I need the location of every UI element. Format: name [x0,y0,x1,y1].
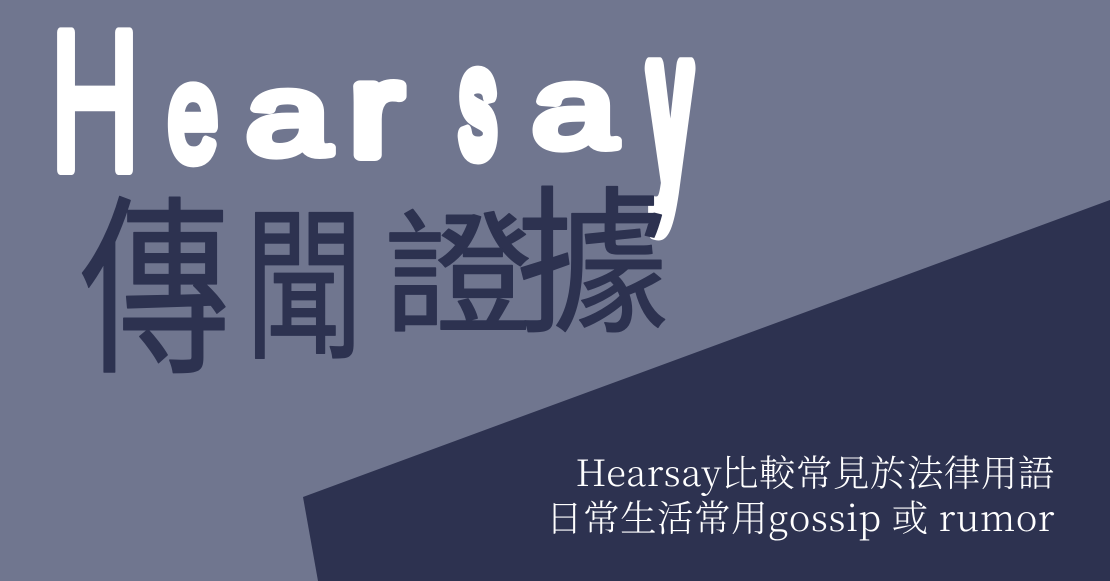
text block: caption: 日常生活常用gossip 或 rumor [546,490,1055,542]
character 傳: 傳 [80,135,230,413]
title: Hearsay: s [460,21,496,186]
letter a: a [246,51,330,179]
text block: caption [546,445,1055,542]
character 證: 證 [384,169,532,361]
letter e: e [168,38,218,189]
panel: dark diagonal shape [303,200,1110,581]
letter r: r [350,37,402,183]
letter a: a [532,44,616,172]
character 聞: 聞 [245,154,363,393]
title: 傳聞證據 [80,135,669,413]
text block: caption: Hearsay比較常見於法律用語 [576,445,1055,497]
character 據: 據 [517,136,669,365]
title: Hearsay [50,0,692,231]
